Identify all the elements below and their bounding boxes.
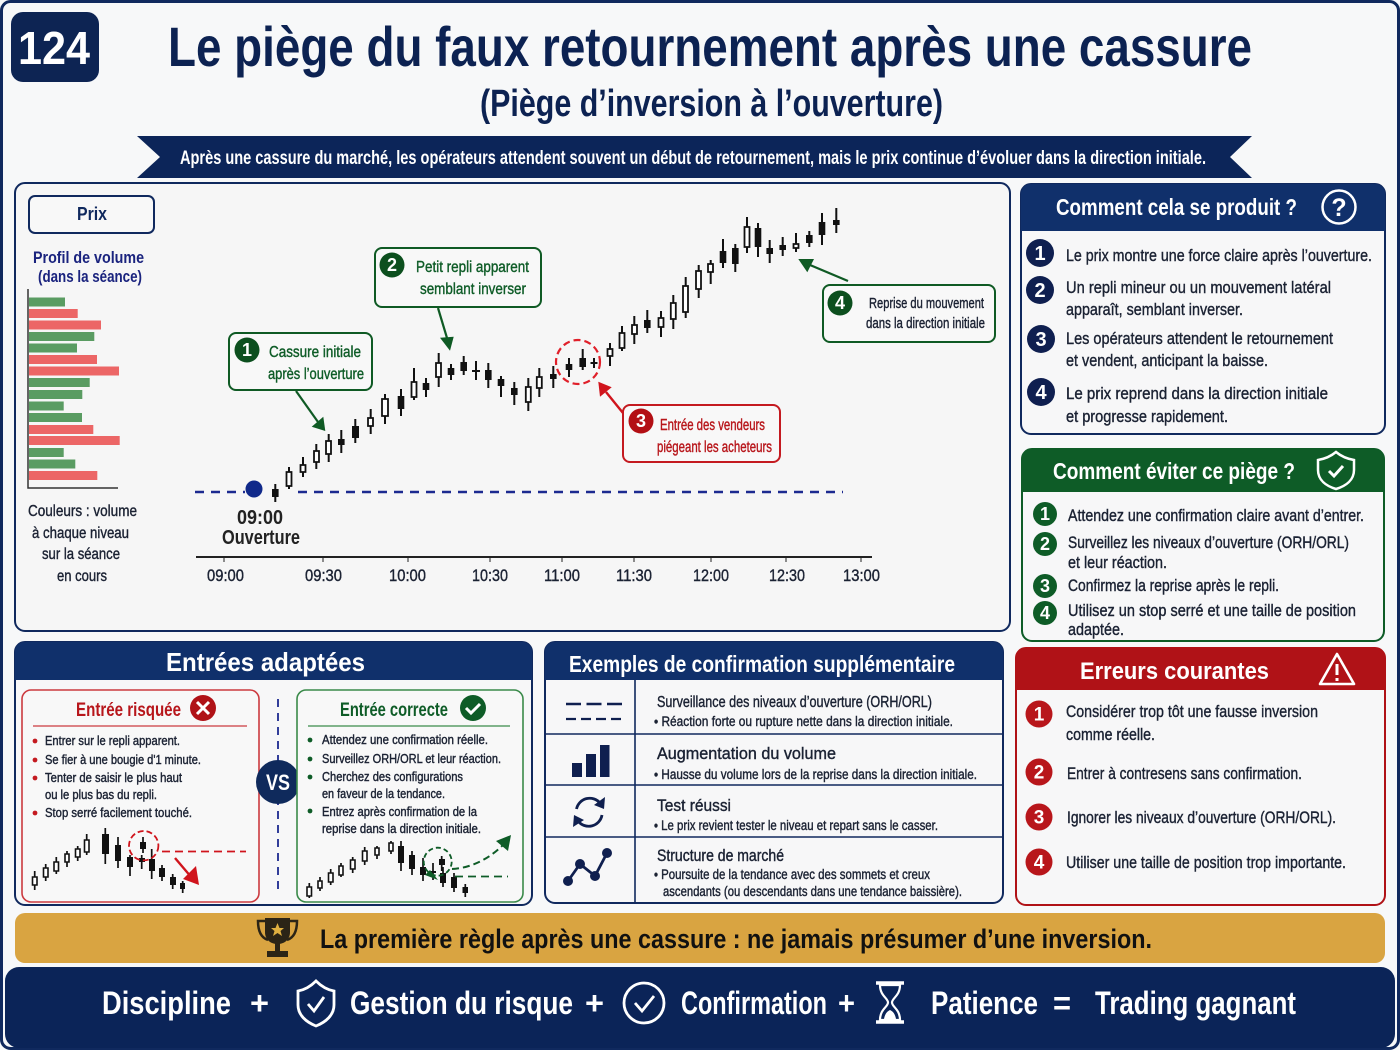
mistake 2: 2 [1034,762,1044,784]
tip 4 [1033,601,1356,639]
correct entry heading: Entrée correcte [340,700,448,721]
callout 2: Petit repli apparent [416,259,529,276]
header: how it happens: Comment cela se produit ? [1056,194,1297,220]
panel: how to avoid [1022,449,1384,641]
row: volume increase: Augmentation du volume [657,744,836,763]
row: market structure: Structure de marché [657,847,784,865]
step 2 [1026,276,1331,319]
footer formula band: Gestion du risque [350,985,573,1021]
time axis: 11:00 [544,566,580,585]
mini chart: correct entry [307,835,511,898]
risky entry list: Se fier à une bougie d'1 minute. [45,753,201,767]
tip 2: Surveillez les niveaux d’ouverture (ORH/ORL) [1068,534,1349,552]
tip 3 [1033,574,1279,598]
title: (Piège d’inversion à l’ouverture) [480,83,943,125]
header: how it happens [1021,184,1385,231]
header: how to avoid: Comment éviter ce piège ? [1053,458,1295,484]
icon: retest arrows [573,797,605,827]
volume profile heading: Profil de volume [33,249,144,267]
time axis: 10:30 [472,566,508,585]
mistake 1: Considérer trop tôt une fausse inversion [1066,702,1318,721]
header: adapted entries [15,642,532,680]
time axis: 11:30 [616,566,652,585]
row: market structure: • Poursuite de la tendance avec des sommets et creux [654,867,930,882]
header: how to avoid [1022,449,1384,492]
arrow: callout 4 to candles [798,259,848,281]
card: risky entry [22,690,259,902]
header: common mistakes [1016,648,1385,690]
mini chart: risky entry [32,828,246,893]
step 4: Le prix reprend dans la direction initiale [1066,384,1328,403]
risky entry list: Stop serré facilement touché. [45,806,192,820]
correct entry list: Surveillez ORH/ORL et leur réaction. [322,752,501,766]
arrow: callout 1 to candles [296,391,325,431]
icon: trophy [258,918,297,957]
arrow: callout 3 to trap zone [598,382,623,413]
arrow: callout 2 to candles [438,308,454,351]
opening level dashed line [195,491,843,493]
risky entry list: Tenter de saisir le plus haut [45,771,182,785]
footer formula band [5,967,1395,1048]
risky entry heading: Entrée risquée [76,700,181,721]
icon: dashed levels [566,704,622,719]
tip 4: adaptée. [1068,621,1124,639]
time axis: 12:30 [769,566,805,585]
card: correct entry [297,690,523,902]
badge: number 124: 124 [18,22,90,74]
dashed circle: trap zone [556,340,600,384]
tip 1 [1033,502,1364,526]
row: volume increase: • Hausse du volume lors de la reprise dans la direction initiale. [654,767,977,782]
callout 2 [375,248,541,307]
step 2: apparaît, semblant inverser. [1066,300,1243,319]
badge: number 124 [11,12,99,82]
opening marker: Ouverture [222,527,300,549]
callout 4 [823,285,995,342]
volume colour note: à chaque niveau [32,525,129,542]
callout 3 [623,405,780,462]
mistake 3: Ignorer les niveaux d’ouverture (ORH/ORL). [1067,808,1336,827]
footer formula band: Confirmation [681,985,827,1021]
header: how it happens: ? [1331,194,1347,222]
correct entry list: reprise dans la direction initiale. [322,822,481,836]
footer formula band: + [250,985,269,1021]
volume profile bars [28,289,120,488]
divider: versus dashed line [277,699,279,894]
correct entry list [308,733,501,836]
correct entry list: en faveur de la tendance. [322,787,445,801]
correct entry list: Cherchez des configurations [322,770,463,784]
mistake 3: 3 [1034,808,1044,828]
tip 4: 4 [1040,603,1050,623]
candlestick chart [272,208,840,502]
time axis [196,557,880,585]
callout 4: 4 [835,293,845,313]
icon: hourglass [876,983,904,1022]
header: confirmation examples [545,642,1003,680]
mistake 4: Utiliser une taille de position trop importante. [1066,853,1346,872]
step 2: Un repli mineur ou un mouvement latéral [1066,278,1331,297]
opening marker: 09:00 [237,507,283,529]
step 3 [1027,325,1333,370]
callout 2: semblant inverser [420,281,527,298]
volume profile heading [33,249,144,286]
price label box [29,196,154,233]
risky entry list [33,734,201,820]
risky entry list: ou le plus bas du repli. [45,788,157,802]
icon: volume bars [572,745,610,777]
callout 4: dans la direction initiale [866,315,985,332]
opening marker [222,480,300,549]
step 3: et vendent, anticipant la baisse. [1066,351,1268,370]
footer formula band: Patience [931,985,1038,1021]
risky entry list: Entrer sur le repli apparent. [45,734,180,748]
tip 3: Confirmez la reprise après le repli. [1068,577,1279,595]
icon: market structure [563,848,612,886]
correct entry list: Entrez après confirmation de la [322,805,477,819]
title [168,15,1252,125]
VS badge: VS [266,770,290,795]
mistake 4 [1026,848,1346,876]
callout 3: piégeant les acheteurs [657,439,772,456]
icon: check circle [624,983,664,1023]
icon: shield [298,981,334,1026]
step 2: 2 [1034,280,1046,302]
gold rule banner [15,913,1385,963]
callout 1: 1 [242,340,252,360]
tip 4: Utilisez un stop serré et une taille de position [1068,602,1356,620]
price label box: Prix [77,204,107,224]
correct entry list: Attendez une confirmation réelle. [322,733,488,747]
footer formula band: + [585,985,604,1021]
footer formula band: Discipline [102,985,231,1021]
time axis: 13:00 [843,566,880,585]
header: common mistakes: Erreurs courantes [1080,658,1269,685]
step 4: et progresse rapidement. [1066,407,1228,426]
header: confirmation examples: Exemples de confirmation supplémentaire [569,651,955,677]
row: successful test [654,796,938,833]
step 1: 1 [1034,243,1046,265]
mistake 1: 1 [1034,704,1045,726]
row: successful test: Test réussi [657,796,731,815]
volume colour note: en cours [57,568,107,585]
mistake 4: 4 [1034,852,1045,874]
row: market structure: ascendants (ou descendants dans une tendance baissière). [663,884,962,899]
panel: how it happens [1021,184,1385,434]
tip 2: et leur réaction. [1068,554,1167,572]
footer formula band: + [838,985,855,1021]
row: opening levels: Surveillance des niveaux d’ouverture (ORH/ORL) [657,694,932,711]
panel: price chart [15,183,1010,631]
tip 2 [1033,532,1349,572]
time axis: 10:00 [389,566,426,585]
callout 1: après l’ouverture [268,366,364,383]
callout 1: Cassure initiale [269,344,361,361]
step 3: 3 [1035,329,1047,351]
step 3: Les opérateurs attendent le retournement [1066,329,1333,348]
footer formula band: Trading gagnant [1095,985,1296,1021]
volume profile heading: (dans la séance) [38,268,142,286]
mistake 2: Entrer à contresens sans confirmation. [1067,764,1302,783]
volume colour note [28,503,137,585]
callout 4: Reprise du mouvement [869,295,985,312]
time axis: 09:00 [207,566,244,585]
row: opening levels: • Réaction forte ou rupture nette dans la direction initiale. [654,714,953,729]
VS badge [256,760,300,804]
panel: confirmation examples [545,642,1003,903]
tip 1: 1 [1040,504,1050,524]
row: market structure [654,847,962,899]
step 4: 4 [1035,382,1047,404]
header: adapted entries: Entrées adaptées [166,647,365,677]
panel: adapted entries [15,642,532,905]
mistake 3 [1026,804,1336,830]
gold rule banner: La première règle après une cassure : ne jamais présumer d’une inversion. [320,924,1152,954]
subtitle ribbon [137,136,1252,178]
row: opening levels [654,694,953,729]
row: volume increase [654,744,977,782]
tip 2: 2 [1040,534,1050,554]
panel: common mistakes [1016,648,1385,905]
mistake 1 [1026,700,1318,744]
row: successful test: • Le prix revient tester le niveau et repart sans le casser. [654,818,938,833]
volume colour note: sur la séance [42,546,120,563]
tip 3: 3 [1040,576,1050,596]
time axis: 09:30 [305,566,342,585]
callout 2: 2 [387,255,397,275]
time axis: 12:00 [693,566,729,585]
mistake 1: comme réelle. [1066,725,1155,744]
callout 3: Entrée des vendeurs [660,417,765,434]
step 4 [1027,378,1328,426]
volume colour note: Couleurs : volume [28,503,137,520]
footer formula band: = [1053,985,1071,1021]
mistake 2 [1026,758,1302,786]
step 1 [1026,239,1372,267]
callout 1 [229,333,372,390]
callout 3: 3 [636,411,646,431]
